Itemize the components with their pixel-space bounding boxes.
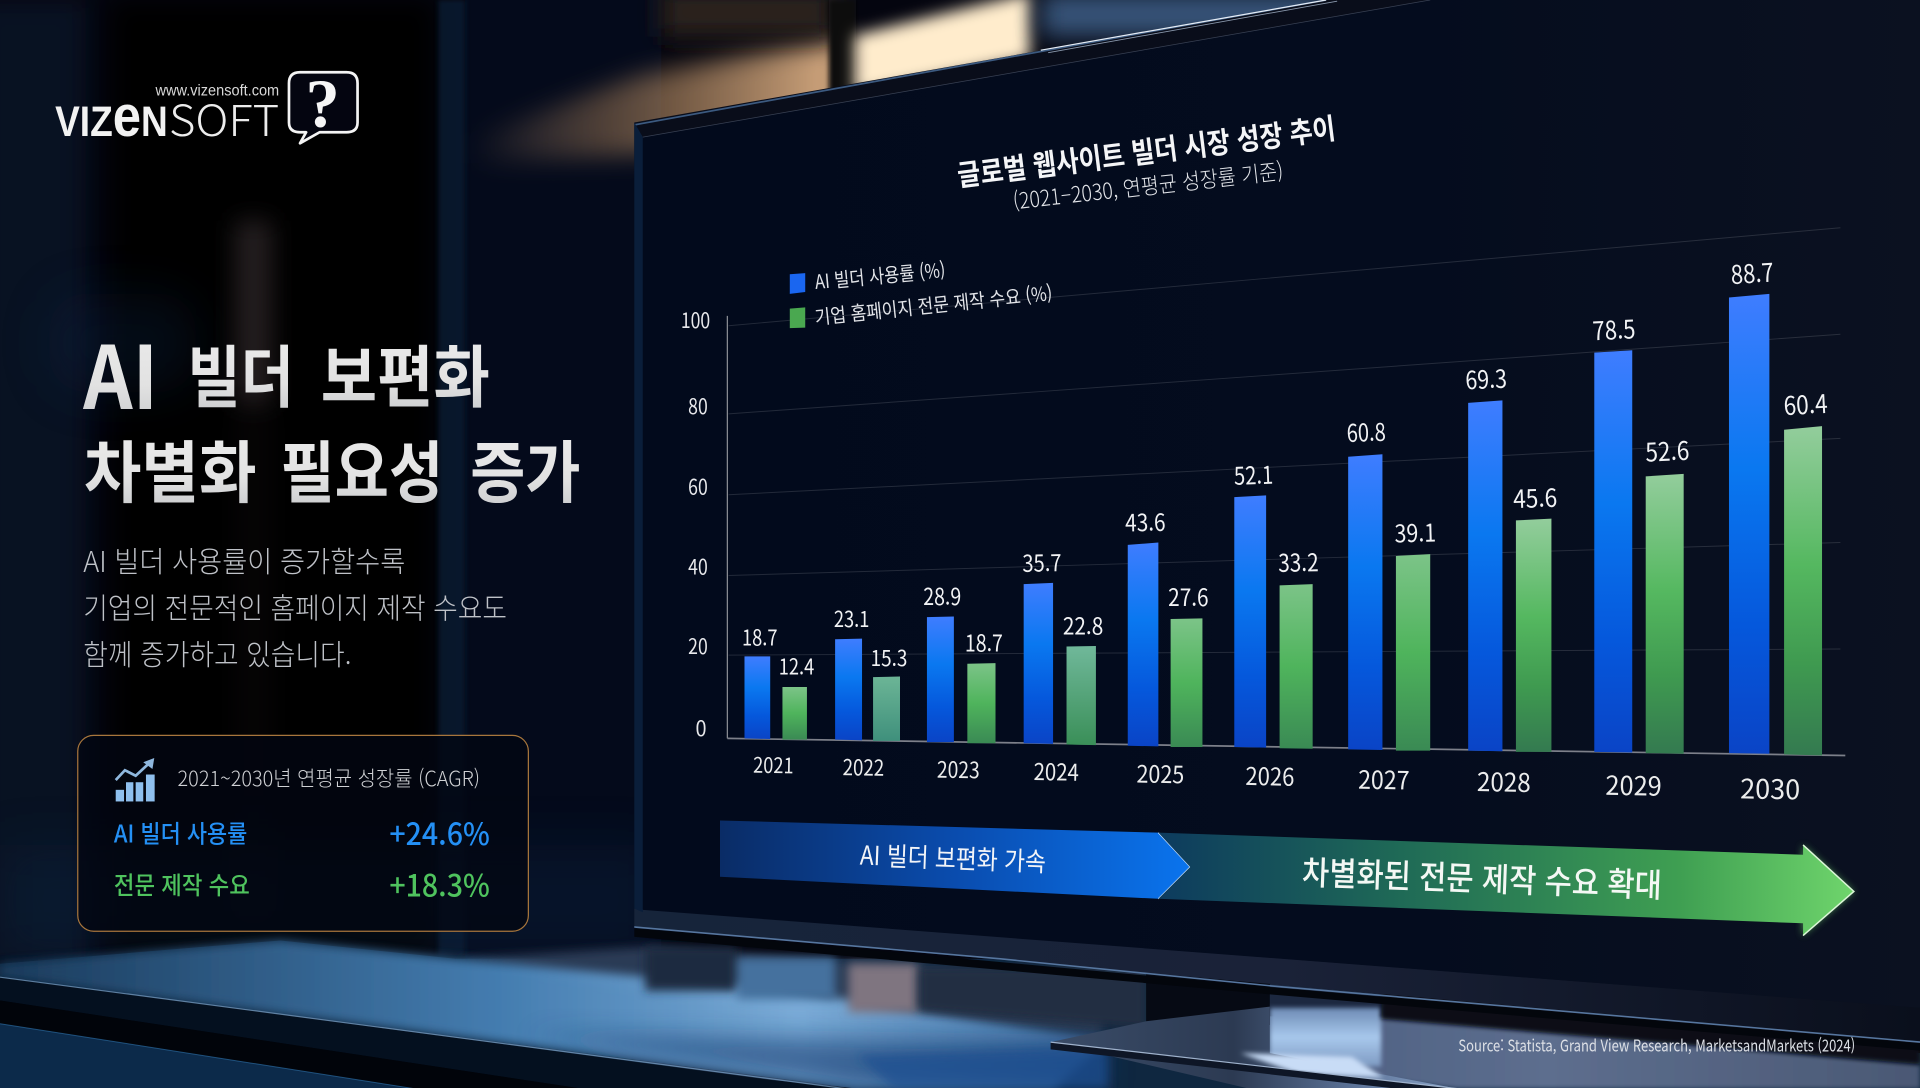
chart title: 글로벌 웹사이트 빌더 시장 성장 추이: [955, 106, 1338, 195]
x axis year labels: 2028: [1477, 762, 1531, 800]
main title: 보편화: [321, 325, 490, 422]
main title: 빌더: [187, 325, 294, 422]
y axis labels: 60: [688, 471, 708, 501]
bar value labels: 52.6: [1644, 431, 1690, 470]
bar value labels: 18.7: [965, 624, 1003, 658]
x axis year labels: 2027: [1358, 761, 1410, 797]
bar value labels: 27.6: [1168, 578, 1209, 613]
professional demand row: [114, 860, 490, 905]
icon: growth chart: [116, 758, 155, 801]
bar value labels: 35.7: [1022, 544, 1062, 579]
y axis labels: [681, 304, 710, 742]
bar value labels: 33.2: [1278, 544, 1319, 580]
x axis year labels: 2024: [1033, 753, 1079, 788]
monitor bezel: [634, 0, 1920, 1051]
green bars: professional demand: [782, 426, 1822, 756]
arrow: professional demand expansion: [1158, 833, 1854, 936]
x axis year labels: [753, 749, 1801, 807]
bar value labels: 18.7: [742, 620, 778, 652]
AI builder row: +24.6%: [389, 809, 490, 854]
desk surface: [0, 940, 1920, 1088]
x axis year labels: 2030: [1740, 767, 1801, 807]
bar value labels: 39.1: [1394, 514, 1437, 550]
bar value labels: [742, 253, 1829, 682]
logo url: www.vizensoft.com: [155, 83, 279, 100]
AI builder row: AI 빌더 사용률: [114, 815, 247, 850]
bar value labels: 43.6: [1125, 503, 1166, 538]
logo speech bubble: [289, 72, 358, 143]
bar value labels: 60.4: [1783, 384, 1829, 423]
y axis labels: 0: [696, 712, 707, 742]
logo wordmark bold: VIZeN: [55, 84, 168, 149]
y axis labels: 80: [688, 390, 708, 420]
x axis year labels: 2021: [753, 749, 794, 780]
chart legend: 기업 홈페이지 전문 제작 수요 (%): [813, 277, 1054, 330]
logo: [55, 66, 358, 149]
x axis year labels: 2023: [937, 752, 980, 785]
description text: [83, 540, 507, 674]
bar value labels: 78.5: [1592, 309, 1636, 348]
y axis labels: 100: [681, 304, 710, 334]
main title: 필요성: [280, 420, 443, 517]
arrow: professional demand expansion: 차별화된 전문 제작 수요 확대: [1301, 846, 1663, 907]
description text: 기업의 전문적인 홈페이지 제작 수요도: [83, 586, 507, 627]
chart legend: [790, 254, 1054, 330]
x axis year labels: 2029: [1605, 764, 1662, 804]
chart legend: AI 빌더 사용률 (%): [813, 254, 947, 295]
professional demand row: +18.3%: [389, 860, 490, 905]
chart title: [955, 106, 1338, 216]
main title: 차별화: [84, 420, 257, 517]
bar value labels: 45.6: [1512, 479, 1558, 516]
bar value labels: 60.8: [1346, 414, 1386, 450]
x axis year labels: 2022: [842, 750, 885, 783]
y axis labels: 40: [688, 550, 708, 580]
y axis labels: 20: [688, 630, 708, 660]
description text: AI 빌더 사용률이 증가할수록: [83, 540, 405, 581]
x axis year labels: 2025: [1136, 754, 1185, 790]
bar chart: [681, 228, 1845, 807]
bar value labels: 88.7: [1730, 253, 1775, 292]
bar value labels: 69.3: [1464, 360, 1508, 397]
bar value labels: 22.8: [1063, 607, 1103, 641]
monitor stand and base: [1051, 961, 1457, 1088]
main title: AI: [82, 309, 158, 435]
logo wordmark light: SOFT: [169, 87, 279, 149]
description text: 함께 증가하고 있습니다.: [83, 633, 351, 674]
bar value labels: 12.4: [779, 650, 814, 682]
desk reflections right of the stand: [1176, 980, 1920, 1088]
professional demand row: 전문 제작 수요: [114, 867, 250, 902]
logo question mark: ?: [306, 66, 340, 142]
bar value labels: 23.1: [834, 602, 869, 634]
bar value labels: 28.9: [923, 578, 961, 612]
x axis year labels: 2026: [1245, 758, 1295, 794]
blue bars: AI builder usage: [744, 294, 1769, 754]
main title: 증가: [470, 420, 580, 517]
main title: [82, 309, 580, 517]
AI builder row: [114, 809, 490, 854]
arrow: AI builder acceleration: AI 빌더 보편화 가속: [859, 834, 1047, 879]
card heading: 2021~2030년 연평균 성장률 (CAGR): [178, 762, 480, 792]
chart subtitle: (2021–2030, 연평균 성장률 기준): [1011, 154, 1285, 216]
bar value labels: 52.1: [1233, 457, 1274, 493]
bar value labels: 15.3: [871, 641, 907, 673]
panel: CAGR card: [78, 735, 528, 931]
arrow: AI builder acceleration: [720, 820, 1190, 899]
